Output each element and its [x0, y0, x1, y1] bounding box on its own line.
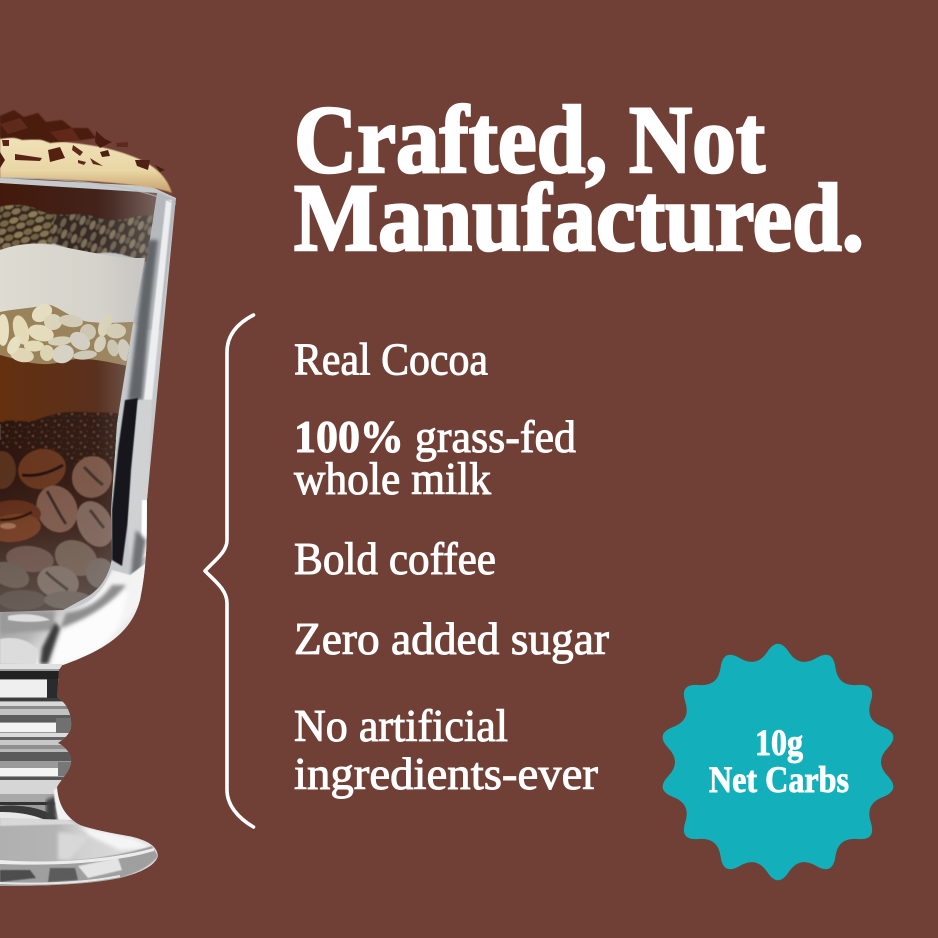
title: Crafted, Not	[294, 86, 765, 193]
item: no artificial ingredients: No artificial	[294, 701, 508, 751]
ground coffee layer	[0, 411, 118, 465]
badge text	[709, 723, 849, 801]
glass wall and bowl	[0, 178, 180, 670]
liquid haze through the glass	[82, 189, 157, 572]
item: no artificial ingredients: ingredients-ever	[294, 749, 598, 799]
bean base layer	[0, 440, 125, 615]
dark liquid layer	[0, 183, 157, 228]
chocolate shavings	[0, 110, 165, 172]
list of ingredients	[294, 334, 609, 799]
title: Manufactured.	[294, 164, 864, 271]
bracket	[205, 315, 254, 827]
coffee grain layer	[0, 205, 155, 262]
title	[294, 86, 864, 271]
item: grass-fed milk	[294, 412, 576, 504]
foam topping	[0, 137, 172, 193]
almond layer	[0, 300, 134, 366]
badge: 10g net carbs	[663, 644, 893, 880]
item: real cocoa: Real Cocoa	[294, 334, 488, 384]
stem with rings	[0, 664, 80, 825]
item: grass-fed milk: whole milk	[294, 454, 491, 504]
badge text: 10g	[755, 723, 803, 764]
cocoa layer	[0, 352, 140, 424]
infographic canvas	[0, 102, 894, 886]
glass foot	[0, 816, 160, 888]
glass of layered mocha	[0, 110, 180, 888]
whipped cream layer	[0, 244, 145, 326]
badge text: Net Carbs	[709, 760, 849, 801]
item: grass-fed milk: 100% grass-fed	[294, 412, 576, 462]
coffee beans	[0, 444, 121, 610]
glass rim	[0, 178, 176, 204]
item: zero added sugar: Zero added sugar	[294, 614, 609, 664]
drink layers	[0, 178, 160, 615]
item: no artificial ingredients	[294, 701, 598, 799]
item: bold coffee: Bold coffee	[294, 534, 496, 584]
badge starburst	[663, 644, 893, 880]
